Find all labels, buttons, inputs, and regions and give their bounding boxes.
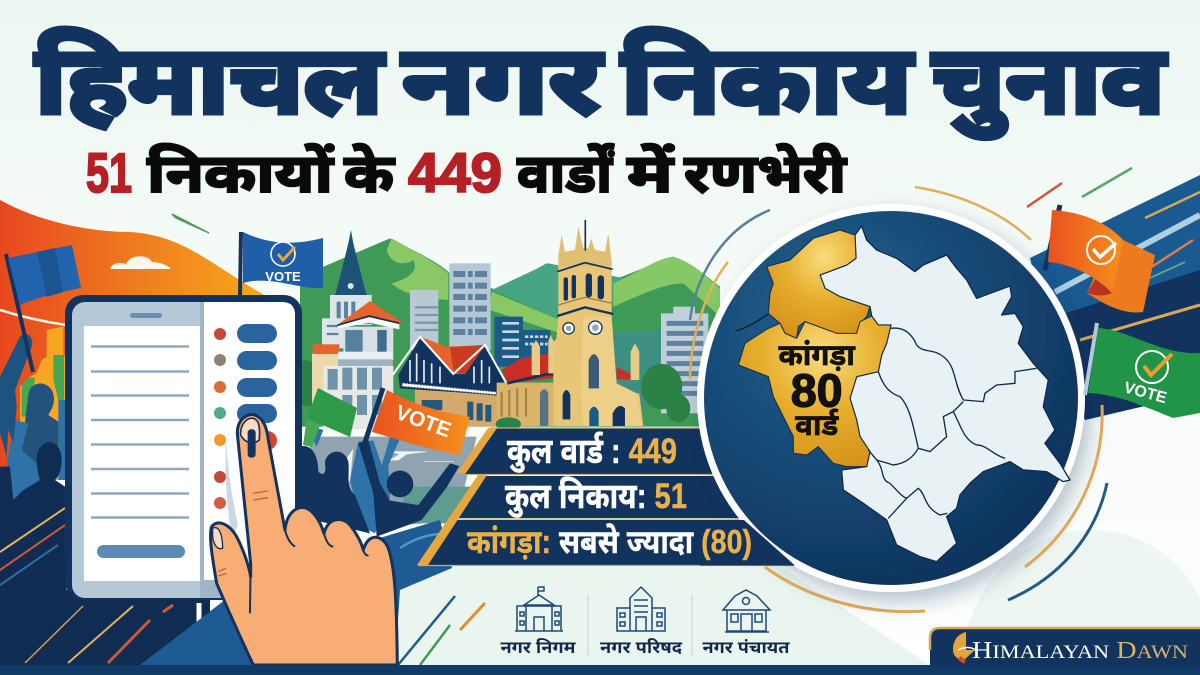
row 3 blending over ring bbox=[700, 520, 795, 566]
stats panel text bbox=[467, 431, 752, 560]
title: चुनाव bbox=[932, 28, 1167, 139]
title bbox=[35, 28, 1167, 139]
blue swoosh under panel bbox=[140, 520, 452, 665]
map circle bbox=[697, 204, 1085, 592]
tudor house bbox=[393, 337, 507, 427]
streaks on mint bbox=[398, 596, 485, 665]
church bbox=[496, 220, 643, 431]
subtitle: रणभेरी bbox=[684, 143, 847, 204]
road and middle crowd bbox=[300, 428, 477, 537]
bottom bar bbox=[0, 665, 1200, 675]
icon: nagar parishad bbox=[617, 587, 665, 631]
tall grey towers bbox=[410, 263, 708, 413]
road bbox=[310, 437, 477, 527]
map label: वार्ड bbox=[795, 408, 839, 442]
left crowd and dark ground bbox=[0, 327, 260, 665]
accent streaks top right bbox=[1027, 168, 1132, 207]
stats panel rows bbox=[417, 428, 795, 566]
label: nagar parishad: नगर परिषद bbox=[600, 637, 682, 657]
logo mark bbox=[953, 632, 976, 664]
logo wordmark: HIMALAYAN DAWN bbox=[972, 638, 1188, 664]
subtitle: निकायों bbox=[147, 143, 334, 204]
flag: green small bbox=[303, 388, 357, 447]
subtitle: 51 bbox=[86, 141, 132, 204]
arcs around map bbox=[690, 187, 1107, 612]
cityscape bbox=[294, 220, 720, 431]
subtitle: के bbox=[344, 143, 395, 204]
background crowd bbox=[0, 327, 65, 560]
flag: blue vote bbox=[240, 232, 323, 296]
check badge bbox=[271, 242, 295, 266]
white ribbon bbox=[0, 310, 66, 325]
check badge bbox=[1136, 351, 1172, 383]
flag: orange right bbox=[1045, 205, 1155, 313]
flag: orange vote: VOTE bbox=[392, 401, 454, 442]
title: हिमाचल bbox=[35, 28, 385, 134]
label: nagar nigam: नगर निगम bbox=[500, 637, 576, 657]
title: नगर bbox=[402, 28, 604, 134]
district boundaries bbox=[868, 328, 1037, 518]
subtitle: 449 bbox=[408, 141, 502, 204]
flag: green right bbox=[1085, 323, 1200, 418]
map label bbox=[778, 339, 856, 442]
title: निकाय bbox=[621, 28, 914, 134]
dark silhouettes bbox=[300, 446, 370, 533]
Himachal map bbox=[735, 226, 1070, 562]
stat: total bodies: कुल निकाय: 51 bbox=[505, 476, 687, 518]
blue figures bbox=[313, 428, 350, 517]
cloud bbox=[110, 256, 171, 269]
body type icons bbox=[500, 587, 790, 657]
subtitle: वार्डों bbox=[517, 143, 615, 204]
map label: कांगड़ा bbox=[778, 339, 856, 372]
flag: blue vote: VOTE bbox=[265, 269, 301, 284]
colonial tower left bbox=[312, 230, 402, 429]
mountains bbox=[300, 238, 720, 427]
decorative streak bbox=[172, 214, 209, 233]
map label: 80 bbox=[791, 365, 843, 417]
Kangra district bbox=[738, 316, 891, 467]
ballot lines bbox=[91, 346, 189, 518]
Chamba district bbox=[767, 230, 870, 338]
hand pressing button bbox=[211, 414, 397, 665]
dots and buttons bbox=[214, 324, 277, 540]
trees bbox=[294, 360, 690, 422]
orange swoosh backdrop bbox=[0, 200, 268, 480]
flag: orange vote bbox=[365, 388, 470, 455]
label: nagar panchayat: नगर पंचायत bbox=[702, 638, 790, 657]
swoosh highlight bbox=[400, 534, 440, 548]
icon: nagar panchayat bbox=[723, 590, 770, 632]
icon: nagar nigam bbox=[515, 587, 563, 631]
logo badge bbox=[930, 628, 1200, 666]
subtitle: में bbox=[627, 143, 674, 204]
flag: blue left bbox=[6, 245, 81, 372]
voting machine bbox=[65, 295, 302, 600]
state outline bbox=[820, 226, 1070, 562]
stat: total wards: कुल वार्ड : 449 bbox=[507, 431, 677, 473]
check badge bbox=[1087, 236, 1116, 264]
right blue band bbox=[1030, 175, 1200, 420]
subtitle bbox=[86, 141, 847, 204]
flag: green right: VOTE bbox=[1122, 379, 1169, 407]
stat: Kangra highest: कांगड़ा: सबसे ज्यादा (80) bbox=[467, 522, 752, 560]
